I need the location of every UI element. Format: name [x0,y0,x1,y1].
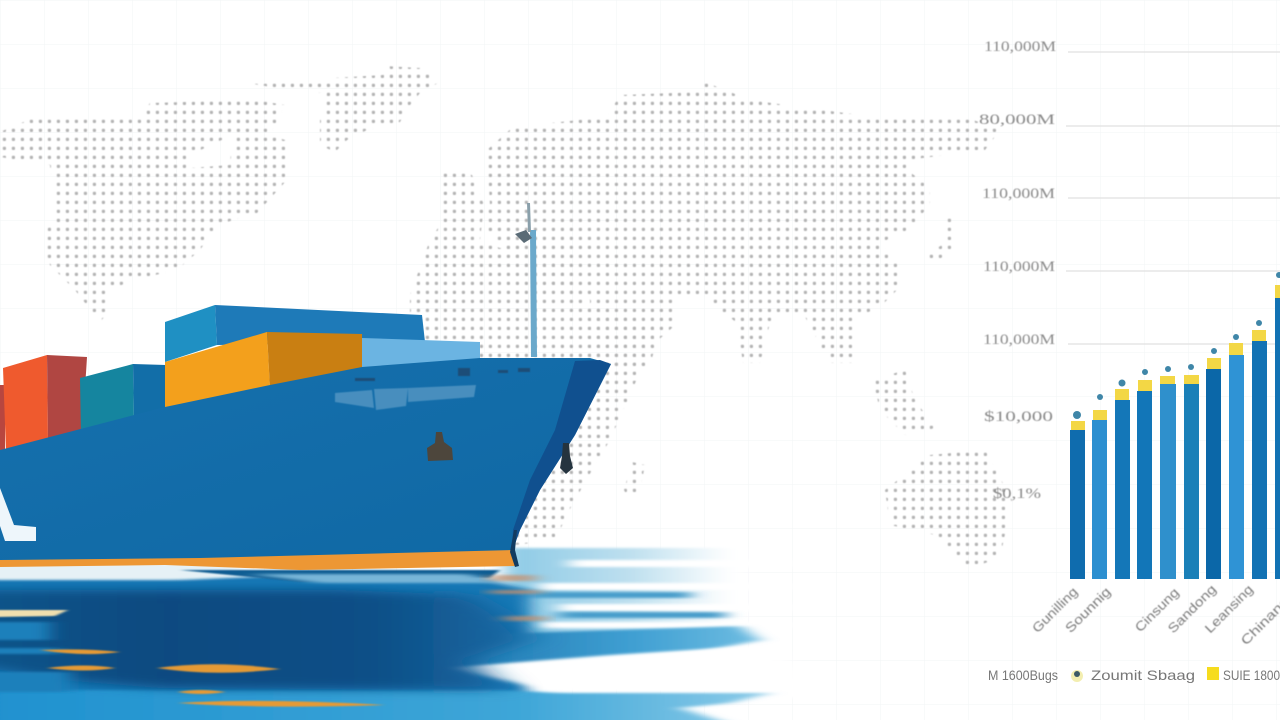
hull detail marks [335,385,476,410]
orange container [165,332,362,410]
ship mast [515,203,537,357]
legend marker: dot [1071,670,1083,682]
water: shadow beneath hull [180,570,500,582]
cargo ship [0,203,611,570]
x axis labels: Cinsung [1132,585,1182,635]
anchor on hull [427,432,453,461]
x axis labels [1029,582,1280,648]
ship bow shadow [512,360,611,552]
ship hull [0,358,611,564]
yellow bar caps [1071,285,1280,430]
pale blue container [362,338,480,372]
water: pale glint [0,610,68,617]
map: greenland [248,66,440,152]
water: dark navy reflection [0,590,530,690]
y axis labels: 110,000M [983,259,1055,275]
orange waterline stripe [0,550,515,570]
map: madagascar [624,462,645,498]
y axis labels: $0,1% [993,486,1041,502]
water: lower bright blue [0,690,770,720]
water: mid bands [530,592,725,618]
bow stem line [510,530,519,567]
water: pale strip under hull [0,564,240,580]
y axis labels: 80,000M [979,112,1055,128]
water [0,548,830,720]
water: orange reflections [40,649,385,707]
blue top container [165,305,425,362]
legend: Zoumit Sbaag [1091,667,1195,683]
y axis labels: 110,000M [983,332,1055,348]
x axis labels: Sounnig [1062,584,1114,636]
map: australia [885,450,1012,568]
water: white wedge [445,645,830,700]
red container [0,355,87,452]
y axis labels: 110,000M [982,186,1055,202]
y axis labels: $10,000 [984,409,1053,425]
y axis labels: 110,000M [984,39,1056,55]
x axis labels: Sandong [1165,582,1219,636]
teal container [80,364,166,436]
water: faint rust streaks [490,575,545,621]
water: pale upper right swell [505,548,740,645]
water: right band [440,626,760,672]
map: europe and africa [410,168,660,545]
x axis labels: Gunilling [1029,584,1081,636]
dotted world map [0,66,1012,568]
water: white gaps [540,560,790,628]
legend: M 1600Bugs [988,667,1058,683]
legend [988,667,1280,683]
chart gridlines [1066,52,1280,344]
map: eurasia [484,82,1000,365]
white hull letter [0,488,36,541]
water: light ripple [250,574,500,583]
bar top markers [1073,272,1280,419]
water: left blue streaks [0,622,70,692]
legend marker: yellow square [1207,667,1219,680]
deck equipment marks [355,368,530,381]
hanging anchor [560,443,573,474]
x axis labels: Leansing [1202,582,1256,636]
water: medium blue body [0,575,530,720]
y axis labels [979,39,1056,502]
map: north america [0,100,287,322]
map: indonesia islands [873,370,935,435]
bars [1070,298,1280,579]
bar chart [979,39,1280,683]
map: japan islands [924,218,954,265]
